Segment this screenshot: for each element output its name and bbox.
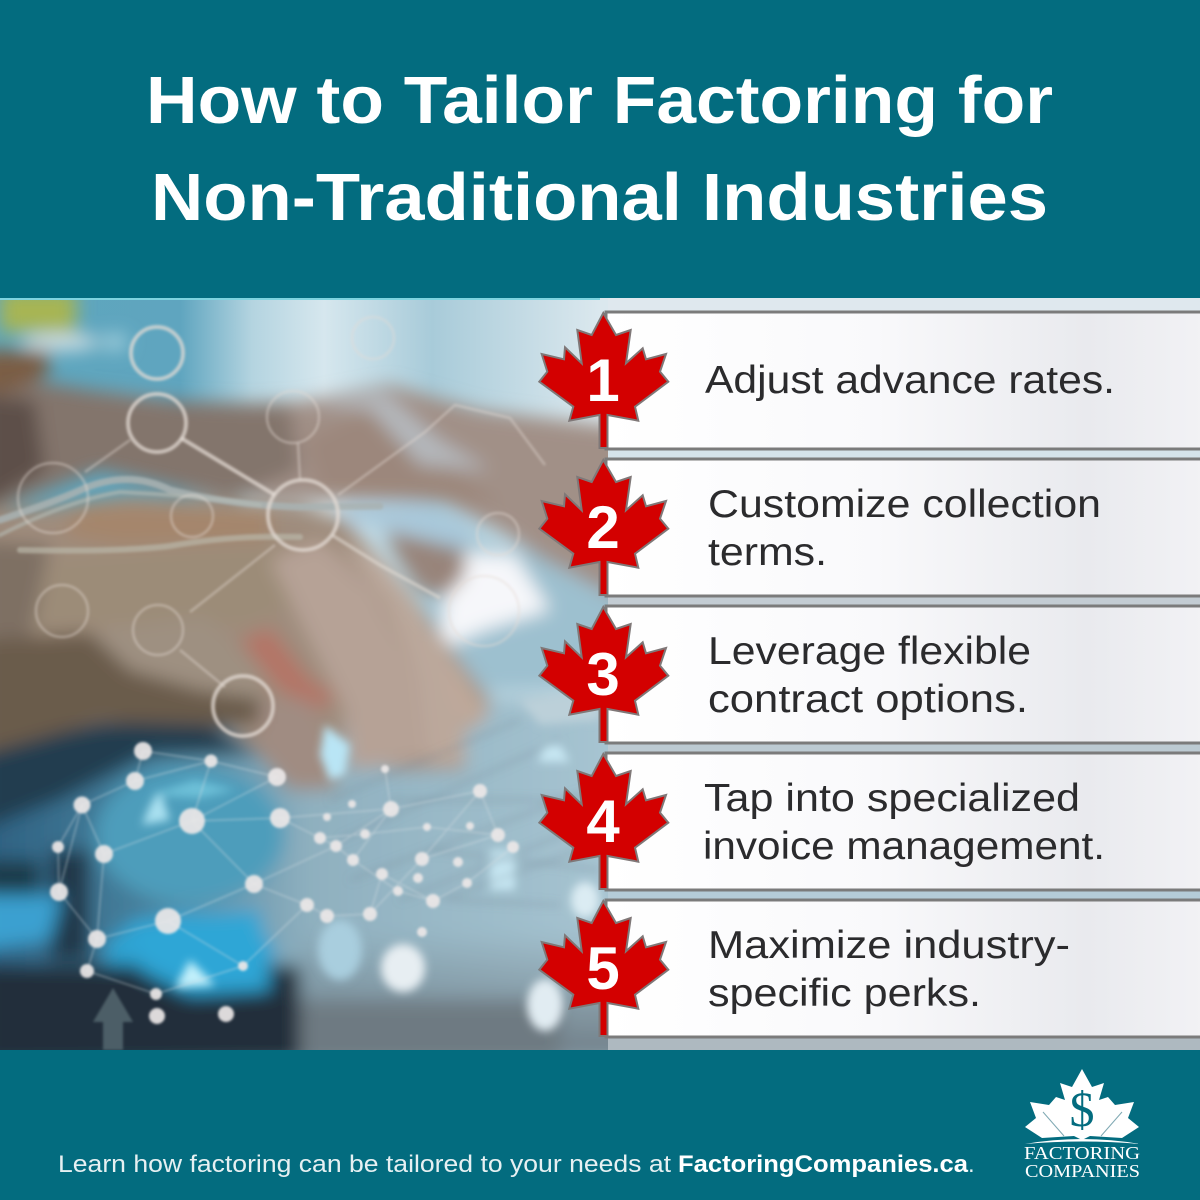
text: step 4: Tap into specialized — [704, 777, 1080, 820]
number 1: 1 — [586, 347, 620, 414]
footer text: Learn how factoring can be tailored to your needs at — [58, 1151, 671, 1178]
panel: step 1 — [539, 312, 1200, 449]
thin cyan edge — [0, 298, 600, 300]
text: step 1: Adjust advance rates. — [705, 359, 1115, 402]
number 3: 3 — [586, 641, 620, 708]
text: step 4: invoice management. — [703, 825, 1105, 868]
title — [146, 63, 1053, 235]
light keys and reflections — [142, 690, 600, 1031]
wavy light bands across wrist — [0, 479, 380, 550]
icon: maple leaf 1 — [539, 313, 668, 448]
upward arrow — [93, 988, 133, 1050]
footer band — [0, 1050, 1200, 1200]
upper hand — [244, 375, 608, 604]
keyboard dark edge — [0, 722, 260, 830]
overlay rings and links — [18, 317, 545, 736]
text: step 3: contract options. — [708, 678, 1028, 721]
key row lines — [410, 792, 580, 900]
dark base of forearm — [0, 626, 268, 764]
cuff band — [342, 499, 409, 530]
panel: step 5 — [539, 900, 1200, 1037]
text: step 4 — [703, 777, 1105, 868]
fingers — [270, 540, 430, 770]
footer text — [58, 1151, 975, 1178]
number 4: 4 — [586, 788, 620, 855]
icon: maple leaf 3 — [539, 607, 668, 742]
text: step 2: terms. — [708, 531, 827, 574]
number 2: 2 — [586, 494, 620, 561]
text: step 5: Maximize industry- — [708, 924, 1070, 967]
text: step 5: specific perks. — [708, 972, 981, 1015]
header band — [0, 0, 1200, 298]
white blob and cuff — [456, 542, 608, 697]
panel: step 2 — [539, 459, 1200, 596]
photo: hands typing on a keyboard with network overlay — [0, 290, 1200, 1080]
text: step 5 — [708, 924, 1070, 1015]
network lines — [58, 751, 513, 994]
logo: Factoring Companies: COMPANIES — [1025, 1161, 1140, 1181]
number 5: 5 — [586, 935, 620, 1002]
logo: Factoring Companies — [1024, 1069, 1140, 1181]
globe glow — [95, 767, 285, 903]
text: step 2: Customize collection — [708, 483, 1101, 526]
title: How to Tailor Factoring for — [146, 63, 1053, 138]
panel: step 4 — [539, 753, 1200, 890]
icon: maple leaf 5 — [539, 901, 668, 1036]
logo: Factoring Companies: FACTORING — [1024, 1143, 1140, 1163]
title: Non-Traditional Industries — [151, 160, 1048, 235]
footer text: FactoringCompanies.ca — [678, 1151, 969, 1178]
lower hand / wrist — [0, 495, 490, 790]
logo: Factoring Companies: $ — [1070, 1081, 1094, 1137]
panel: step 3 — [539, 606, 1200, 743]
icon: maple leaf 4 — [539, 754, 668, 889]
text: step 3: Leverage flexible — [708, 630, 1031, 673]
dark lower corner — [0, 965, 300, 1065]
keyboard base — [0, 700, 640, 1080]
network nodes — [50, 742, 519, 1024]
footer text: . — [968, 1151, 975, 1178]
text: step 3 — [708, 630, 1031, 721]
text: step 2 — [708, 483, 1101, 574]
icon: maple leaf 2 — [539, 460, 668, 595]
